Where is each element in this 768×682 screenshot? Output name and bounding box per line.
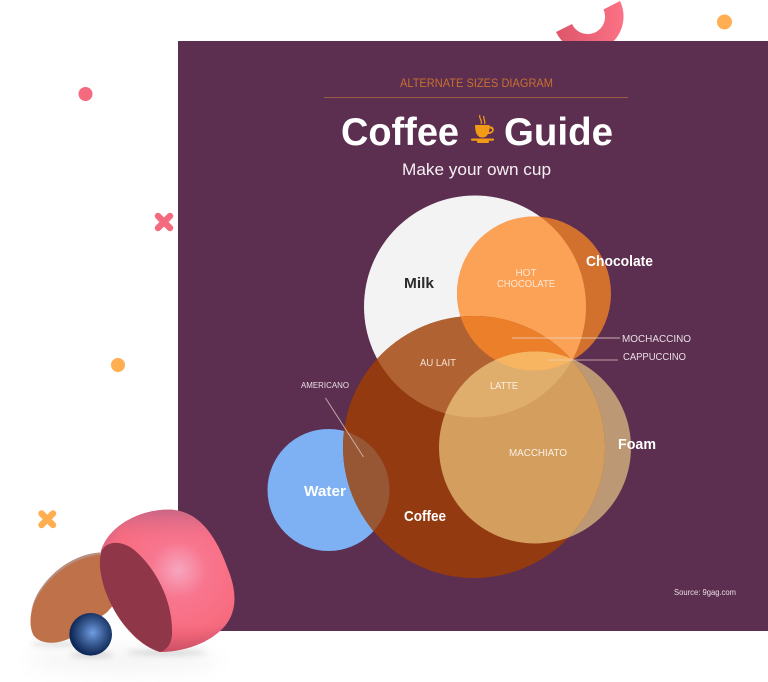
overlap: milk and coffee [377,316,562,414]
header label: ALTERNATE SIZES DIAGRAM [400,76,553,90]
circle: foam [439,352,631,544]
red cross [158,216,170,228]
label: Foam: Foam [618,436,656,453]
subtitle: Make your own cup [402,160,551,179]
label: macchiato: MACCHIATO [509,448,567,459]
icon: coffee cup [471,115,494,143]
title: Coffee [341,111,459,154]
circle: milk [364,196,586,418]
venn diagram [268,196,631,578]
label: hot chocolate: CHOCOLATE [497,279,555,290]
label: au lait: AU LAIT [420,358,456,369]
red hemisphere [100,510,234,652]
overlap: foam and coffee [439,360,605,544]
source note: Source: 9gag.com [674,588,736,597]
overlap: milk and chocolate [457,216,586,359]
label: hot chocolate: HOT [515,268,537,279]
orange cross [42,514,53,525]
orange dot top right [717,14,732,30]
label: hot chocolate [497,268,555,290]
panel: background [178,41,768,631]
orange dot [111,358,125,372]
label: Milk: Milk [404,275,435,292]
label: mochaccino with leader: MOCHACCINO [622,334,691,345]
overlap: chocolate and coffee [460,316,570,360]
overlap: foam and milk [445,352,572,418]
blue ball [69,613,112,656]
label: cappuccino with leader: CAPPUCCINO [623,352,686,363]
overlap: foam and chocolate [496,352,574,370]
title [341,111,613,154]
ground shadow [27,642,220,672]
red dot [78,87,92,101]
orange half disc [30,552,115,643]
label: cappuccino with leader [548,352,686,363]
title: Guide [504,111,613,154]
circle: chocolate [457,216,611,370]
3d shapes illustration [27,510,234,672]
header rule [324,97,628,98]
label: latte: LATTE [490,381,518,392]
decorative arc shape [556,1,624,52]
overlap: water and coffee [343,431,390,531]
label: Coffee: Coffee [404,508,446,525]
label: Chocolate: Chocolate [586,253,653,270]
label: americano with leader [301,381,364,457]
circle: coffee [343,316,605,578]
label: Water: Water [304,483,346,500]
circle: water [268,429,390,551]
label: americano with leader: AMERICANO [301,381,349,390]
